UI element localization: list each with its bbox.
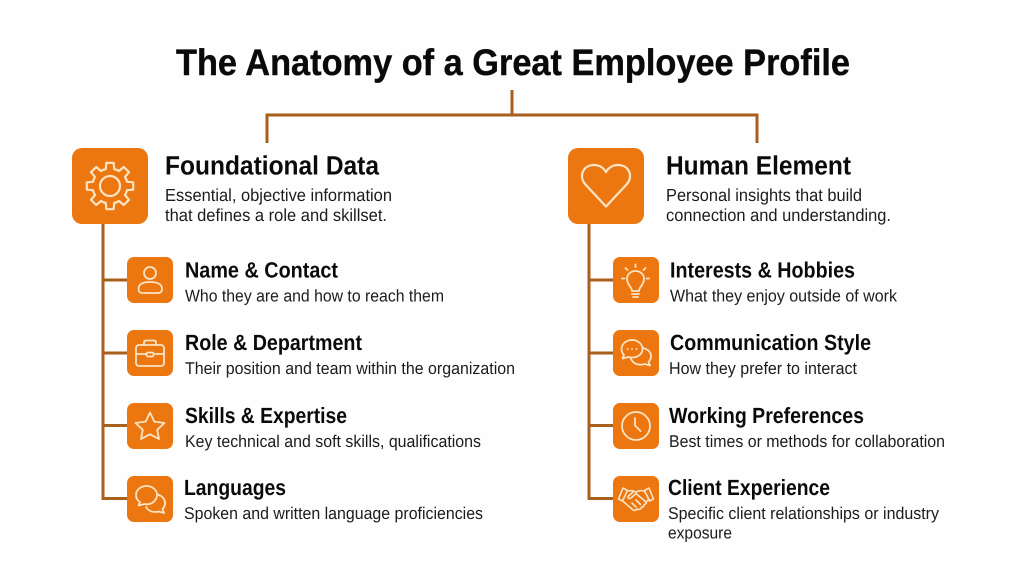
item: role and department <box>127 330 515 378</box>
item: skills and expertise <box>127 403 481 451</box>
description: client experience <box>668 504 939 542</box>
description: name and contact: Who they are and how to reach them <box>185 286 444 306</box>
label: skills and expertise: Skills & Expertise <box>185 403 347 428</box>
connector: right trunk and branches <box>589 224 613 498</box>
description: languages: Spoken and written language proficiencies <box>184 504 483 523</box>
label: role and department: Role & Department <box>185 330 363 355</box>
panel: foundational data <box>72 148 515 523</box>
item: client experience <box>613 475 939 542</box>
description: client experience: exposure <box>668 524 732 542</box>
item: working preferences <box>613 403 945 451</box>
label: working preferences: Working Preferences <box>669 403 864 428</box>
label: communication style: Communication Style <box>670 330 871 355</box>
title: The Anatomy of a Great Employee Profile <box>176 42 850 83</box>
description: human element: Personal insights that build <box>666 185 862 205</box>
icon: gear <box>72 148 148 224</box>
connector: title to both columns <box>267 90 757 143</box>
heading: human element: Human Element <box>666 150 851 180</box>
description: human element <box>666 185 891 225</box>
description: role and department: Their position and team within the organization <box>185 359 515 378</box>
icon: chat bubbles with dots <box>613 330 659 376</box>
item: communication style <box>613 330 871 378</box>
panel: human element <box>568 148 945 542</box>
label: interests and hobbies: Interests & Hobbies <box>670 258 855 282</box>
description: foundational data: that defines a role and skillset. <box>165 205 387 225</box>
icon: clock <box>613 403 659 449</box>
connector: left trunk and branches <box>103 224 127 498</box>
item: languages <box>127 475 483 523</box>
icon: speech bubbles <box>127 476 173 522</box>
description: working preferences: Best times or methods for collaboration <box>669 432 945 451</box>
icon: star <box>127 403 173 449</box>
description: client experience: Specific client relationships or industry <box>668 504 939 523</box>
icon: heart <box>568 148 644 224</box>
heading: foundational data: Foundational Data <box>165 150 379 180</box>
label: client experience: Client Experience <box>668 475 830 500</box>
description: communication style: How they prefer to interact <box>669 359 857 378</box>
icon: light bulb <box>613 257 659 303</box>
item: interests and hobbies <box>613 257 897 306</box>
description: skills and expertise: Key technical and soft skills, qualifications <box>185 432 481 451</box>
description: foundational data: Essential, objective information <box>165 185 392 205</box>
label: languages: Languages <box>184 475 286 500</box>
icon: person <box>127 257 173 303</box>
icon: briefcase <box>127 330 173 376</box>
description: foundational data <box>165 185 392 225</box>
description: interests and hobbies: What they enjoy outside of work <box>670 286 897 306</box>
description: human element: connection and understanding. <box>666 205 891 225</box>
label: name and contact: Name & Contact <box>185 258 339 282</box>
item: name and contact <box>127 257 444 306</box>
icon: handshake <box>613 476 659 522</box>
